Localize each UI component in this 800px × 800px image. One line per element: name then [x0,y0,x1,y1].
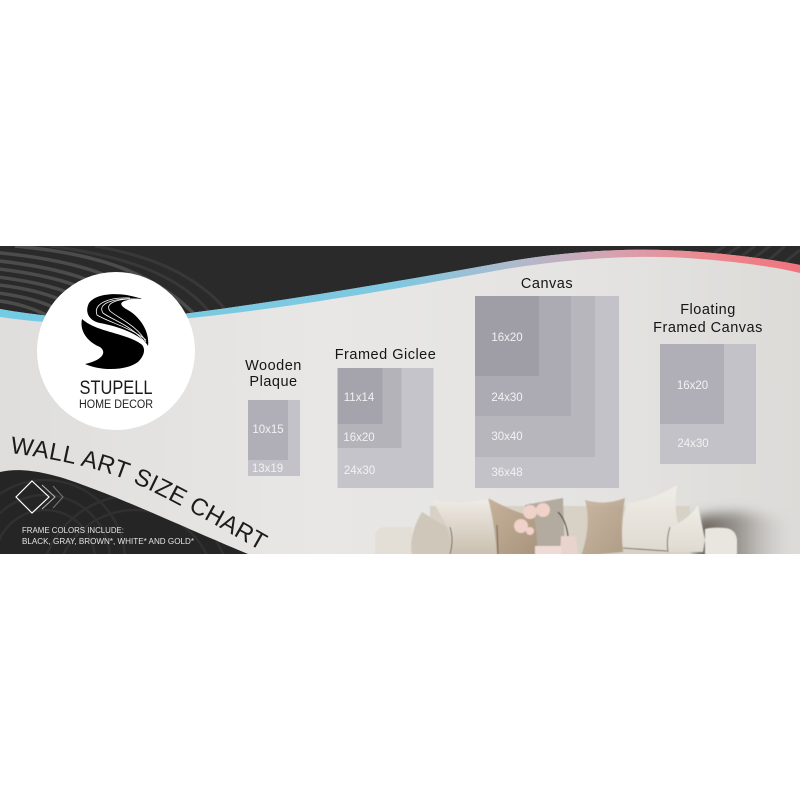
heading: Framed Canvas [653,320,763,336]
wall shadow behind sofa [690,505,780,554]
frame colours text: BLACK, GRAY, BROWN*, WHITE* AND GOLD* [22,536,195,546]
heading: Floating [680,302,736,318]
sofa back [430,506,690,556]
logo wordmark: STUPELL [80,377,153,399]
size box 16x20 [660,344,724,424]
frame colours text [22,525,195,546]
right arm [705,528,737,556]
heading: Wooden [245,358,302,374]
heading: Plaque [249,374,298,390]
size labels: 11x14 [344,392,375,404]
panel: floating framed canvas [653,302,763,464]
icon: logo S swoosh [81,294,148,369]
size box 13x19 [248,400,300,476]
heading: Canvas [521,276,573,292]
size labels: 16x20 [343,432,375,444]
orchid flowers [514,503,550,535]
size labels: 30x40 [491,431,523,443]
size labels: 24x30 [491,392,523,404]
pillow seams [450,525,670,554]
pillow: beige [581,498,625,556]
pillow: white large [622,485,678,550]
pillow: white small [667,505,705,552]
logo tagline: HOME DECOR [79,399,153,411]
panel: framed giclee [335,347,436,488]
size labels: 13x19 [252,463,283,475]
pillow: tan [488,498,538,556]
size box 16x20 [338,368,402,448]
size labels: 36x48 [491,467,523,479]
bottom-left dark band with frame colours note [0,470,248,554]
size labels: 16x20 [491,332,523,344]
sofa with pillows and flowers [375,485,737,556]
colour ribbon under top band [0,250,800,324]
pillow: small cream [411,512,451,556]
icon: frame diamonds [16,481,63,513]
size box 30x40 [475,296,595,457]
title: wall art size chart: WALL ART SIZE CHART [12,436,268,548]
banner background: wall [0,246,800,554]
size labels [491,332,523,479]
size box 16x20 [475,296,539,376]
size box 24x30 [338,368,434,488]
top dark wave band [0,246,800,316]
stem [558,512,568,536]
size box 24x30 [660,344,756,464]
size labels: 16x20 [677,380,708,392]
size labels [343,392,375,477]
size labels [252,424,284,475]
panel: wooden plaque [245,358,302,476]
left arm [375,527,412,556]
panel: canvas [475,276,619,488]
size box 36x48 [475,296,619,488]
heading: Framed Giclee [335,347,436,363]
size box 24x30 [475,296,571,416]
size labels: 24x30 [344,465,375,477]
size box 11x14 [338,368,382,424]
size labels: 10x15 [252,424,284,436]
frame colours text: FRAME COLORS INCLUDE: [22,525,124,535]
vase [560,536,578,556]
logo badge [37,272,195,430]
dish [535,546,561,556]
pillow: large cream [436,500,497,554]
size box 10x15 [248,400,288,460]
size labels [677,380,709,450]
pillow: gray [524,498,564,546]
size labels: 24x30 [677,438,709,450]
